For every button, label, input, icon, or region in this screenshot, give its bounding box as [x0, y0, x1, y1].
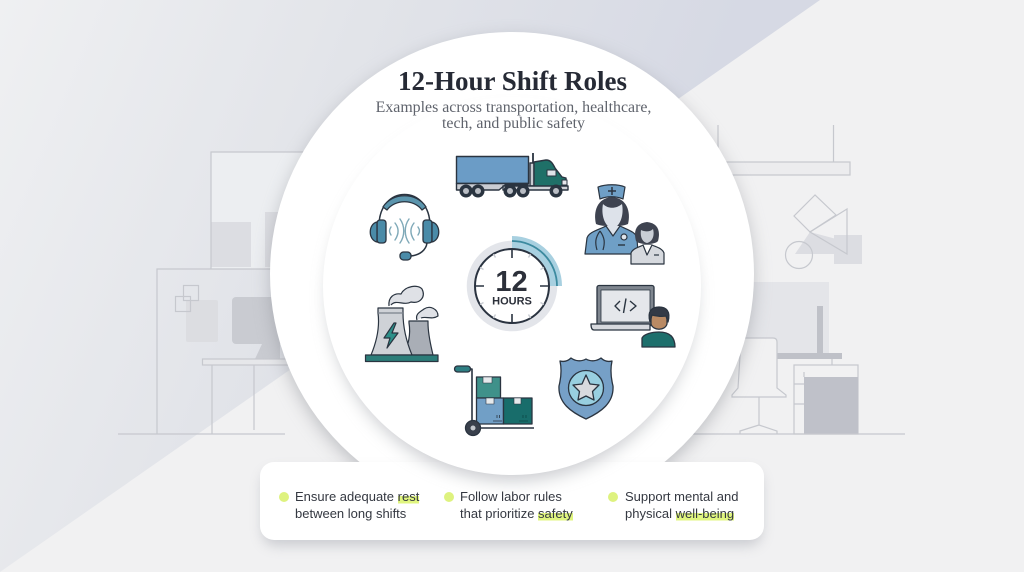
- clock number: 12: [495, 266, 528, 298]
- takeaway: well-being: physical well-being: [625, 506, 734, 520]
- icon: police badge: [559, 358, 613, 419]
- takeaway: well-being: Support mental and: [625, 489, 738, 504]
- icon: twelve hour clock: [471, 236, 562, 327]
- takeaway: rest: between long shifts: [295, 506, 406, 520]
- takeaway: safety: [444, 489, 573, 520]
- subtitle: Examples across transportation, healthcare,: [376, 98, 651, 116]
- takeaway: well-being: [608, 489, 738, 520]
- bullet: safety: [444, 492, 454, 502]
- main white circle: [270, 32, 754, 516]
- inner circle: [323, 97, 701, 480]
- title: 12-Hour Shift Roles: [398, 66, 627, 96]
- icon: hand truck with boxes: [454, 366, 534, 436]
- bullet: rest: [279, 492, 289, 502]
- takeaway: safety: Follow labor rules: [460, 489, 562, 504]
- bottom card shadow: [262, 470, 762, 546]
- bullet: well-being: [608, 492, 618, 502]
- outer circle shadow: [271, 39, 753, 521]
- icon: headset: [370, 194, 439, 260]
- subtitle: tech, and public safety: [442, 115, 585, 132]
- clock label: HOURS: [492, 296, 532, 308]
- icon: nurse and doctor: [585, 185, 664, 264]
- background illustration: left office: [118, 152, 311, 434]
- icon: laptop developer: [591, 286, 675, 347]
- bottom panel card: [260, 462, 764, 540]
- icon: truck: [456, 153, 568, 198]
- icon: power plant: [366, 286, 438, 362]
- takeaway: safety: that prioritize safety: [460, 506, 573, 520]
- background illustration: right office: [690, 125, 905, 434]
- takeaway: rest: Ensure adequate rest: [295, 489, 419, 504]
- takeaway: rest: [279, 489, 420, 520]
- subtitle: [376, 98, 651, 132]
